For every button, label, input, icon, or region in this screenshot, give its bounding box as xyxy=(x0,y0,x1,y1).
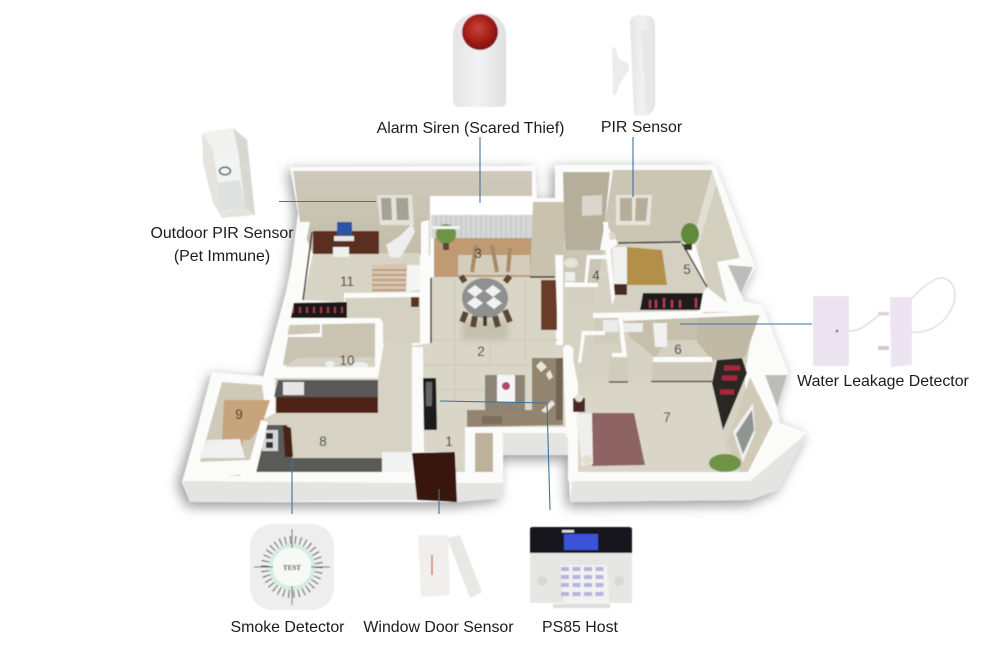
plant: bedroom xyxy=(681,223,699,245)
room numbers: 7 xyxy=(663,410,671,425)
sofa xyxy=(467,358,563,427)
right outer wall tops xyxy=(568,165,807,481)
label: outdoor pir sensor: Outdoor PIR Sensor xyxy=(150,225,294,242)
label: ps85 host: PS85 Host xyxy=(542,619,619,636)
striped rug xyxy=(372,264,408,294)
device: alarm siren xyxy=(453,13,506,107)
device: water leakage detector xyxy=(813,278,955,367)
rug and coffee table xyxy=(485,375,525,413)
label: window door sensor: Window Door Sensor xyxy=(363,619,514,636)
inner wall at door xyxy=(412,347,424,452)
label: water leakage detector: Water Leakage Detector xyxy=(797,373,970,390)
room numbers: 6 xyxy=(674,342,682,357)
dining table xyxy=(461,276,510,340)
label: alarm siren: Alarm Siren (Scared Thief) xyxy=(377,120,564,137)
room numbers: 8 xyxy=(319,434,327,449)
bedroom 5 xyxy=(603,170,740,310)
device: pir sensor xyxy=(612,15,655,116)
base floor xyxy=(563,250,755,472)
connector lines xyxy=(279,137,812,514)
room: kitchen 8 and utility 9 xyxy=(183,343,412,481)
room numbers: 11 xyxy=(340,274,354,289)
kitchen counter xyxy=(274,380,378,397)
bed 7 xyxy=(592,413,645,466)
label: smoke detector: Smoke Detector xyxy=(231,619,345,636)
plant 7 xyxy=(709,454,741,472)
device: outdoor pir sensor xyxy=(202,128,255,218)
desk xyxy=(313,222,379,257)
label: pir sensor: PIR Sensor xyxy=(601,119,683,136)
exterior notches xyxy=(727,265,787,407)
plant: balcony xyxy=(436,224,456,244)
tv stand xyxy=(423,378,437,430)
closet 5 xyxy=(640,293,703,310)
room: bedrooms and bath xyxy=(555,165,807,481)
utility room xyxy=(196,382,264,476)
window wall 7 xyxy=(727,377,773,472)
bed 5 xyxy=(627,247,667,285)
sideboard xyxy=(541,280,557,330)
wall below sofa xyxy=(456,427,570,482)
lounge chair xyxy=(386,224,415,258)
bath 4 xyxy=(555,172,613,342)
wardrobe 7 xyxy=(712,358,747,430)
room 10 xyxy=(283,323,375,368)
closet xyxy=(287,302,347,318)
window: bedroom xyxy=(616,195,652,225)
baseboard xyxy=(431,277,555,343)
room numbers: 4 xyxy=(592,268,600,283)
room numbers: 10 xyxy=(339,353,355,368)
bedroom 7 xyxy=(573,358,773,472)
room numbers xyxy=(235,246,691,449)
entrance door xyxy=(412,452,457,502)
room: balcony 3 and living room 2 xyxy=(412,196,570,502)
room numbers: 5 xyxy=(683,262,691,277)
interior walls left wing xyxy=(263,220,429,390)
room numbers: 9 xyxy=(235,407,243,422)
room numbers: 1 xyxy=(445,434,453,449)
front faces xyxy=(183,433,807,502)
device: smoke detector: TEST xyxy=(283,564,301,572)
sofa bed xyxy=(406,265,420,292)
device: ps85 host xyxy=(530,527,632,608)
lower counter xyxy=(253,425,382,472)
living floor xyxy=(412,277,569,472)
floor plan xyxy=(177,165,807,507)
plan shadow xyxy=(177,168,804,507)
label: pet immune: (Pet Immune) xyxy=(174,248,270,265)
room numbers: 3 xyxy=(474,246,482,261)
room: left wing xyxy=(263,171,532,390)
device: smoke detector xyxy=(250,524,334,610)
room numbers: 2 xyxy=(477,344,485,359)
device: window door sensor xyxy=(418,535,482,598)
bath 6 xyxy=(563,311,760,437)
plan walls silhouette xyxy=(182,165,807,502)
window: left room xyxy=(377,195,414,225)
